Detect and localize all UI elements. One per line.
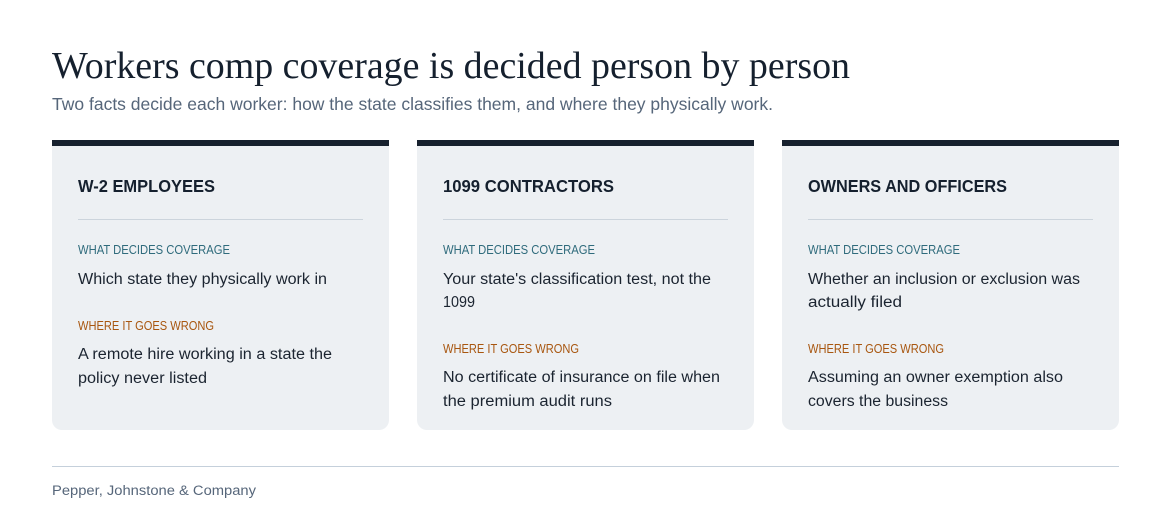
panel: 1099 contractors [417, 140, 754, 430]
text: what decides coverage: actually filed [808, 294, 902, 311]
text: where it goes wrong: the premium audit runs [443, 393, 612, 410]
label: where it goes wrong: WHERE IT GOES WRONG [78, 319, 214, 333]
panel: W-2 employees [52, 140, 389, 430]
heading: W-2 employees: W-2 EMPLOYEES [78, 176, 215, 196]
text: where it goes wrong [443, 369, 720, 410]
text: what decides coverage: 1099 [443, 294, 475, 311]
text: what decides coverage [808, 271, 1080, 311]
heading: 1099 contractors: 1099 CONTRACTORS [443, 176, 614, 196]
text: where it goes wrong: policy never listed [78, 370, 207, 387]
text: where it goes wrong [78, 346, 332, 387]
text: what decides coverage [443, 271, 711, 311]
label: what decides coverage: WHAT DECIDES COVERAGE [808, 243, 960, 257]
text: what decides coverage: Which state they physically work in [78, 271, 327, 288]
label: where it goes wrong: WHERE IT GOES WRONG [808, 342, 944, 356]
text: where it goes wrong: No certificate of insurance on file when [443, 369, 720, 386]
panel: owners and officers [782, 140, 1119, 430]
text: where it goes wrong [808, 369, 1063, 410]
label: where it goes wrong: WHERE IT GOES WRONG [443, 342, 579, 356]
subtitle: Two facts decide each worker: how the state classifies them, and where they physically work. [52, 94, 773, 114]
heading: owners and officers: OWNERS AND OFFICERS [808, 176, 1007, 196]
title: Workers comp coverage is decided person by person [52, 45, 850, 87]
text: where it goes wrong: A remote hire working in a state the [78, 346, 332, 363]
text: what decides coverage: Whether an inclusion or exclusion was [808, 271, 1080, 288]
text: what decides coverage: Your state's classification test, not the [443, 271, 711, 288]
text: where it goes wrong: covers the business [808, 393, 948, 410]
text: where it goes wrong: Assuming an owner exemption also [808, 369, 1063, 386]
label: what decides coverage: WHAT DECIDES COVERAGE [78, 243, 230, 257]
label: what decides coverage: WHAT DECIDES COVERAGE [443, 243, 595, 257]
footer source: Pepper, Johnstone & Company [52, 483, 256, 498]
